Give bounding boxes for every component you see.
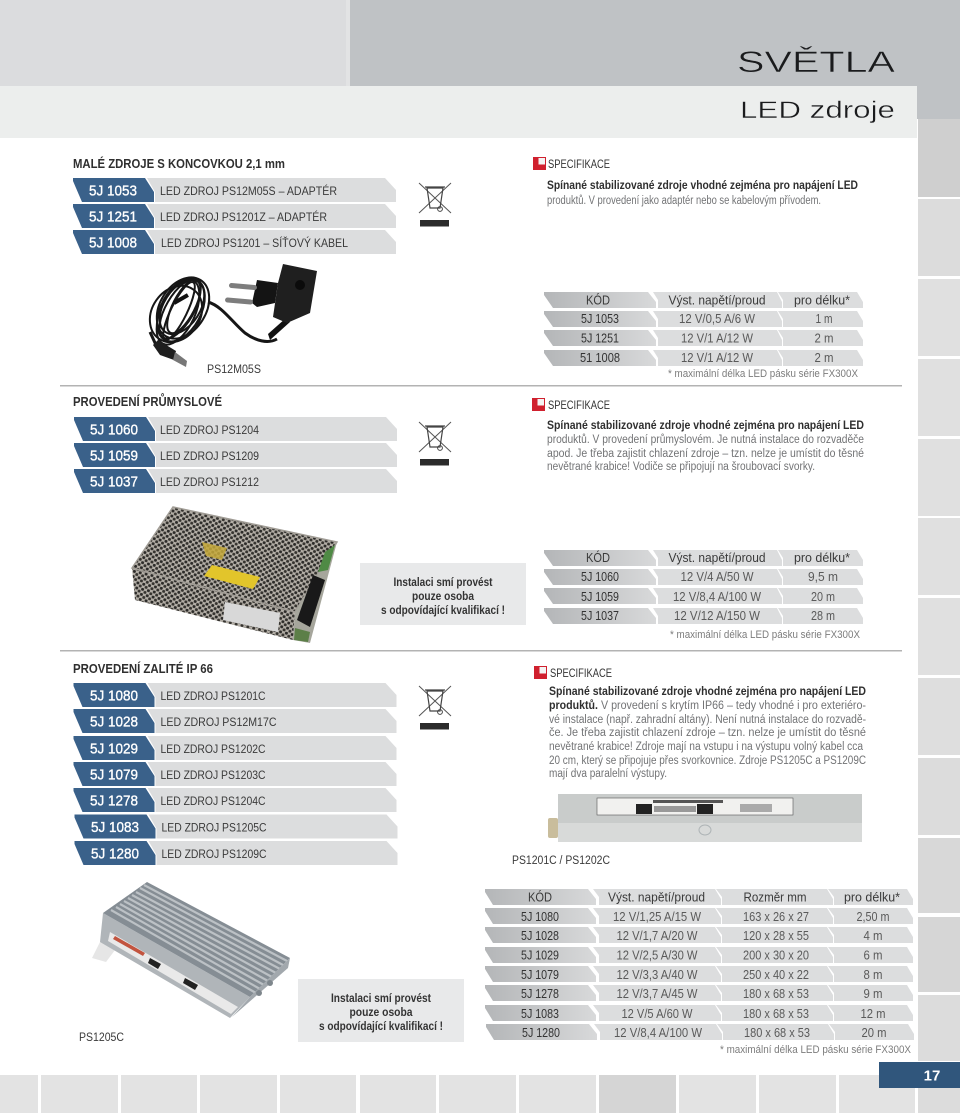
spec text: Spínané stabilizované zdroje vhodné zejména pro napájení LED [547, 180, 858, 192]
table 1 text: 12 V/1 A/12 W [681, 332, 753, 346]
table 3 [485, 889, 914, 1056]
table 1 text: 1 m [816, 312, 832, 326]
spec text: produktů. V provedení průmyslovém. Je nutná instalace do rozvaděče [547, 434, 864, 446]
icon: spec marker [533, 157, 546, 170]
table 3 text: pro délku* [844, 890, 900, 904]
table 1 text: pro délku* [794, 292, 850, 308]
table 3 text: 8 m [864, 968, 882, 982]
table 2 text: 5J 1060 [581, 570, 619, 584]
product row 5J 1083 [74, 814, 398, 838]
product row 5J 1053: 5J 1053 [89, 182, 137, 200]
title: SVĚTLA [737, 46, 895, 79]
product row 5J 1251: LED ZDROJ PS1201Z – ADAPTÉR [160, 211, 327, 224]
spec text: produktů. [549, 700, 598, 712]
table 3 text: 5J 1080 [521, 910, 559, 924]
icon: spec marker [532, 398, 545, 411]
product row 5J 1083: 5J 1083 [91, 819, 139, 836]
table 1 text: 12 V/1 A/12 W [681, 351, 753, 365]
caption PS1201C / PS1202C: PS1201C / PS1202C [512, 855, 610, 867]
table 1 shapes [544, 292, 863, 366]
table 3 text [521, 890, 900, 1040]
table 3 text: 5J 1028 [521, 929, 559, 943]
table 1 [544, 292, 863, 380]
table 2 [544, 550, 863, 641]
section divider 1 [60, 385, 902, 386]
table 3 text: 12 V/2,5 A/30 W [616, 948, 698, 962]
table 3 text: 12 m [860, 1007, 886, 1021]
table 3 text: 5J 1083 [521, 1007, 559, 1021]
spec text: vé instalace (např. zahradní altány). Není nutná instalace do rozvadě- [549, 714, 866, 726]
specification 1 [533, 157, 858, 207]
table 1 text: 12 V/0,5 A/6 W [679, 312, 755, 326]
spec text [547, 420, 864, 473]
page number [879, 1062, 960, 1088]
spec heading: SPECIFIKACE [548, 398, 610, 412]
product row 5J 1079: LED ZDROJ PS1203C [160, 770, 266, 782]
bottom tile strip [0, 1075, 960, 1113]
panel: potted IP66 power supplies [73, 661, 451, 865]
spec heading: SPECIFIKACE [548, 157, 610, 171]
specification 3 [534, 666, 866, 780]
table 3 text: 2,50 m [856, 910, 890, 924]
product row 5J 1060: LED ZDROJ PS1204 [160, 425, 260, 437]
product row 5J 1037 [74, 469, 397, 493]
product row 5J 1053: LED ZDROJ PS12M05S – ADAPTÉR [160, 185, 337, 198]
table 1 text: KÓD [586, 292, 610, 308]
table 3 shapes [485, 889, 914, 1040]
product row 5J 1028: LED ZDROJ PS12M17C [160, 717, 276, 729]
callout: installation notice: Instalaci smí provést [331, 993, 431, 1005]
table 3 text: KÓD [528, 890, 552, 904]
table 3 text: Výst. napětí/proud [608, 890, 705, 904]
heading: MALÉ ZDROJE S KONCOVKOU 2,1 mm [73, 156, 285, 171]
product row 5J 1059: LED ZDROJ PS1209 [160, 451, 259, 463]
table 3 text: 12 V/3,7 A/45 W [616, 987, 698, 1001]
caption PS1205C: PS1205C [79, 1032, 124, 1044]
icon: recycling bin [419, 422, 451, 466]
product row 5J 1251 [73, 204, 396, 228]
table 2 text: 20 m [811, 590, 835, 604]
callout: installation notice: s odpovídající kvalifikací ! [319, 1021, 443, 1033]
product row 5J 1029: 5J 1029 [90, 740, 138, 758]
table 2 text: 12 V/12 A/150 W [674, 609, 760, 623]
product row 5J 1080: LED ZDROJ PS1201C [160, 691, 266, 703]
callout: installation notice [360, 563, 526, 625]
table 1 text: 2 m [814, 351, 834, 365]
page number: 17 [924, 1068, 940, 1084]
table 2 text: 12 V/8,4 A/100 W [673, 590, 761, 604]
spec text: Spínané stabilizované zdroje vhodné zejména pro napájení LED [547, 420, 864, 432]
table 3 text: 180 x 68 x 53 [743, 1007, 809, 1021]
product row 5J 1280: LED ZDROJ PS1209C [162, 849, 266, 861]
table 2 text: pro délku* [794, 550, 850, 565]
table 3 text: 12 V/3,3 A/40 W [616, 968, 698, 982]
product row 5J 1053 [73, 178, 396, 202]
table 3 text: 250 x 40 x 22 [743, 968, 809, 982]
spec text: če. Je třeba zajistit chlazení zdroje – tzn. nelze je umístit do těsné [549, 727, 866, 739]
table 3 text: 12 V/5 A/60 W [622, 1007, 693, 1021]
product row 5J 1060 [74, 417, 397, 441]
table 1 text: 5J 1053 [581, 312, 619, 326]
product row 5J 1059 [74, 443, 397, 467]
spec text: Spínané stabilizované zdroje vhodné zejména pro napájení LED [549, 686, 866, 698]
table 1 text: 51 1008 [580, 351, 620, 365]
icon: recycling bin [419, 183, 451, 226]
panel: industrial power supplies [73, 393, 451, 493]
table 2 footnote: * maximální délka LED pásku série FX300X [670, 629, 861, 641]
table 3 text: 5J 1278 [521, 987, 559, 1001]
product row 5J 1080: 5J 1080 [90, 688, 138, 704]
product row 5J 1028 [74, 709, 396, 733]
table 1 text [580, 292, 850, 365]
table 3 text: 5J 1029 [521, 948, 559, 962]
product row 5J 1037: LED ZDROJ PS1212 [160, 477, 259, 489]
icon: recycling bin [419, 686, 451, 730]
product row 5J 1037: 5J 1037 [90, 474, 138, 490]
spec text [547, 180, 858, 207]
spec text: nevětrané krabice! Vodiče se připojují na šroubovací svorky. [547, 461, 815, 473]
callout: installation notice: s odpovídající kvalifikací ! [381, 605, 505, 617]
table 1 text: 5J 1251 [581, 332, 619, 346]
table 3 text: Rozměr mm [744, 890, 806, 904]
table 2 text: 28 m [811, 609, 835, 623]
table 3 text: 180 x 68 x 53 [744, 1026, 810, 1040]
header background band [0, 0, 960, 138]
heading: PROVEDENÍ PRŮMYSLOVÉ [73, 393, 222, 409]
product row 5J 1080 [74, 683, 396, 707]
product row 5J 1008: 5J 1008 [89, 234, 137, 252]
product row 5J 1008: LED ZDROJ PS1201 – SÍŤOVÝ KABEL [161, 237, 349, 250]
table 3 text: 20 m [862, 1026, 886, 1040]
photo: perforated metal power supply [132, 507, 337, 643]
table 3 text: 9 m [864, 987, 882, 1001]
product row 5J 1079: 5J 1079 [90, 766, 138, 784]
product row 5J 1060: 5J 1060 [90, 422, 138, 438]
caption PS12M05S: PS12M05S [207, 364, 261, 376]
table 1 text: Výst. napětí/proud [668, 292, 766, 308]
spec text: produktů. V provedení jako adaptér nebo se kabelovým přívodem. [547, 195, 821, 207]
table 3 text: 4 m [864, 929, 882, 943]
table 2 text: 12 V/4 A/50 W [680, 570, 754, 584]
product row 5J 1079 [74, 762, 396, 786]
product row 5J 1028: 5J 1028 [90, 714, 138, 730]
photo: plug adapter with cable [139, 264, 317, 367]
spec heading: SPECIFIKACE [550, 666, 612, 680]
table 3 text: 6 m [864, 948, 882, 962]
spec text: V provedení s krytím IP66 – tedy vhodné i pro exteriéro- [601, 700, 866, 712]
product row 5J 1278: LED ZDROJ PS1204C [160, 796, 266, 808]
spec text: 20 cm, který se připojuje přes svorkovnice. Zdroje PS1205C a PS1209C [549, 755, 866, 767]
section divider 2 [60, 650, 902, 652]
spec text: mají dva paralelní výstupy. [549, 768, 667, 780]
table 1 footnote: * maximální délka LED pásku série FX300X [668, 368, 859, 380]
spec text: nevětrané krabice! Zdroje mají na vstupu i na výstupu volný kabel cca [549, 741, 864, 753]
product row 5J 1029 [74, 736, 396, 760]
callout: installation notice [298, 979, 464, 1042]
panel: small power supplies [73, 156, 451, 254]
spec text [549, 686, 866, 780]
right side tile strip [918, 119, 960, 1061]
product row 5J 1280: 5J 1280 [91, 846, 139, 862]
product row 5J 1008 [73, 230, 396, 254]
table 2 text: 9,5 m [808, 570, 838, 584]
product row 5J 1251: 5J 1251 [89, 208, 137, 226]
table 2 text: Výst. napětí/proud [668, 550, 766, 565]
table 2 text: KÓD [586, 550, 610, 565]
callout: installation notice: Instalaci smí provést [394, 577, 493, 589]
table 3 text: 5J 1280 [522, 1026, 560, 1040]
specification 2 [532, 398, 864, 473]
table 3 text: 12 V/1,7 A/20 W [616, 929, 698, 943]
table 2 text [581, 550, 850, 623]
table 2 text: 5J 1037 [581, 609, 619, 623]
product row 5J 1059: 5J 1059 [90, 448, 138, 464]
table 3 text: 163 x 26 x 27 [743, 910, 809, 924]
icon: spec marker [534, 666, 547, 679]
subtitle: LED zdroje [740, 97, 895, 124]
table 1 text: 2 m [814, 332, 834, 346]
photo: finned IP66 power supply [92, 882, 290, 1018]
table 3 footnote: * maximální délka LED pásku série FX300X [720, 1044, 912, 1056]
table 3 text: 12 V/1,25 A/15 W [613, 910, 701, 924]
spec text: apod. Je třeba zajistit chlazení zdroje – tzn. nelze je umístit do těsné [547, 448, 864, 460]
callout: installation notice: pouze osoba [350, 1007, 413, 1019]
callout: installation notice: pouze osoba [412, 591, 475, 603]
product row 5J 1280 [74, 841, 398, 865]
table 3 text: 12 V/8,4 A/100 W [614, 1026, 702, 1040]
photo: slim IP66 power supply [548, 794, 862, 842]
table 2 text: 5J 1059 [581, 590, 619, 604]
product row 5J 1278 [74, 788, 396, 812]
table 3 text: 120 x 28 x 55 [743, 929, 809, 943]
table 2 shapes [544, 550, 863, 624]
table 3 text: 200 x 30 x 20 [743, 948, 809, 962]
heading: PROVEDENÍ ZALITÉ IP 66 [73, 661, 213, 676]
product row 5J 1029: LED ZDROJ PS1202C [160, 744, 266, 756]
table 3 text: 5J 1079 [521, 968, 559, 982]
product row 5J 1083: LED ZDROJ PS1205C [162, 822, 266, 834]
table 3 text: 180 x 68 x 53 [743, 987, 809, 1001]
product row 5J 1278: 5J 1278 [90, 792, 138, 810]
